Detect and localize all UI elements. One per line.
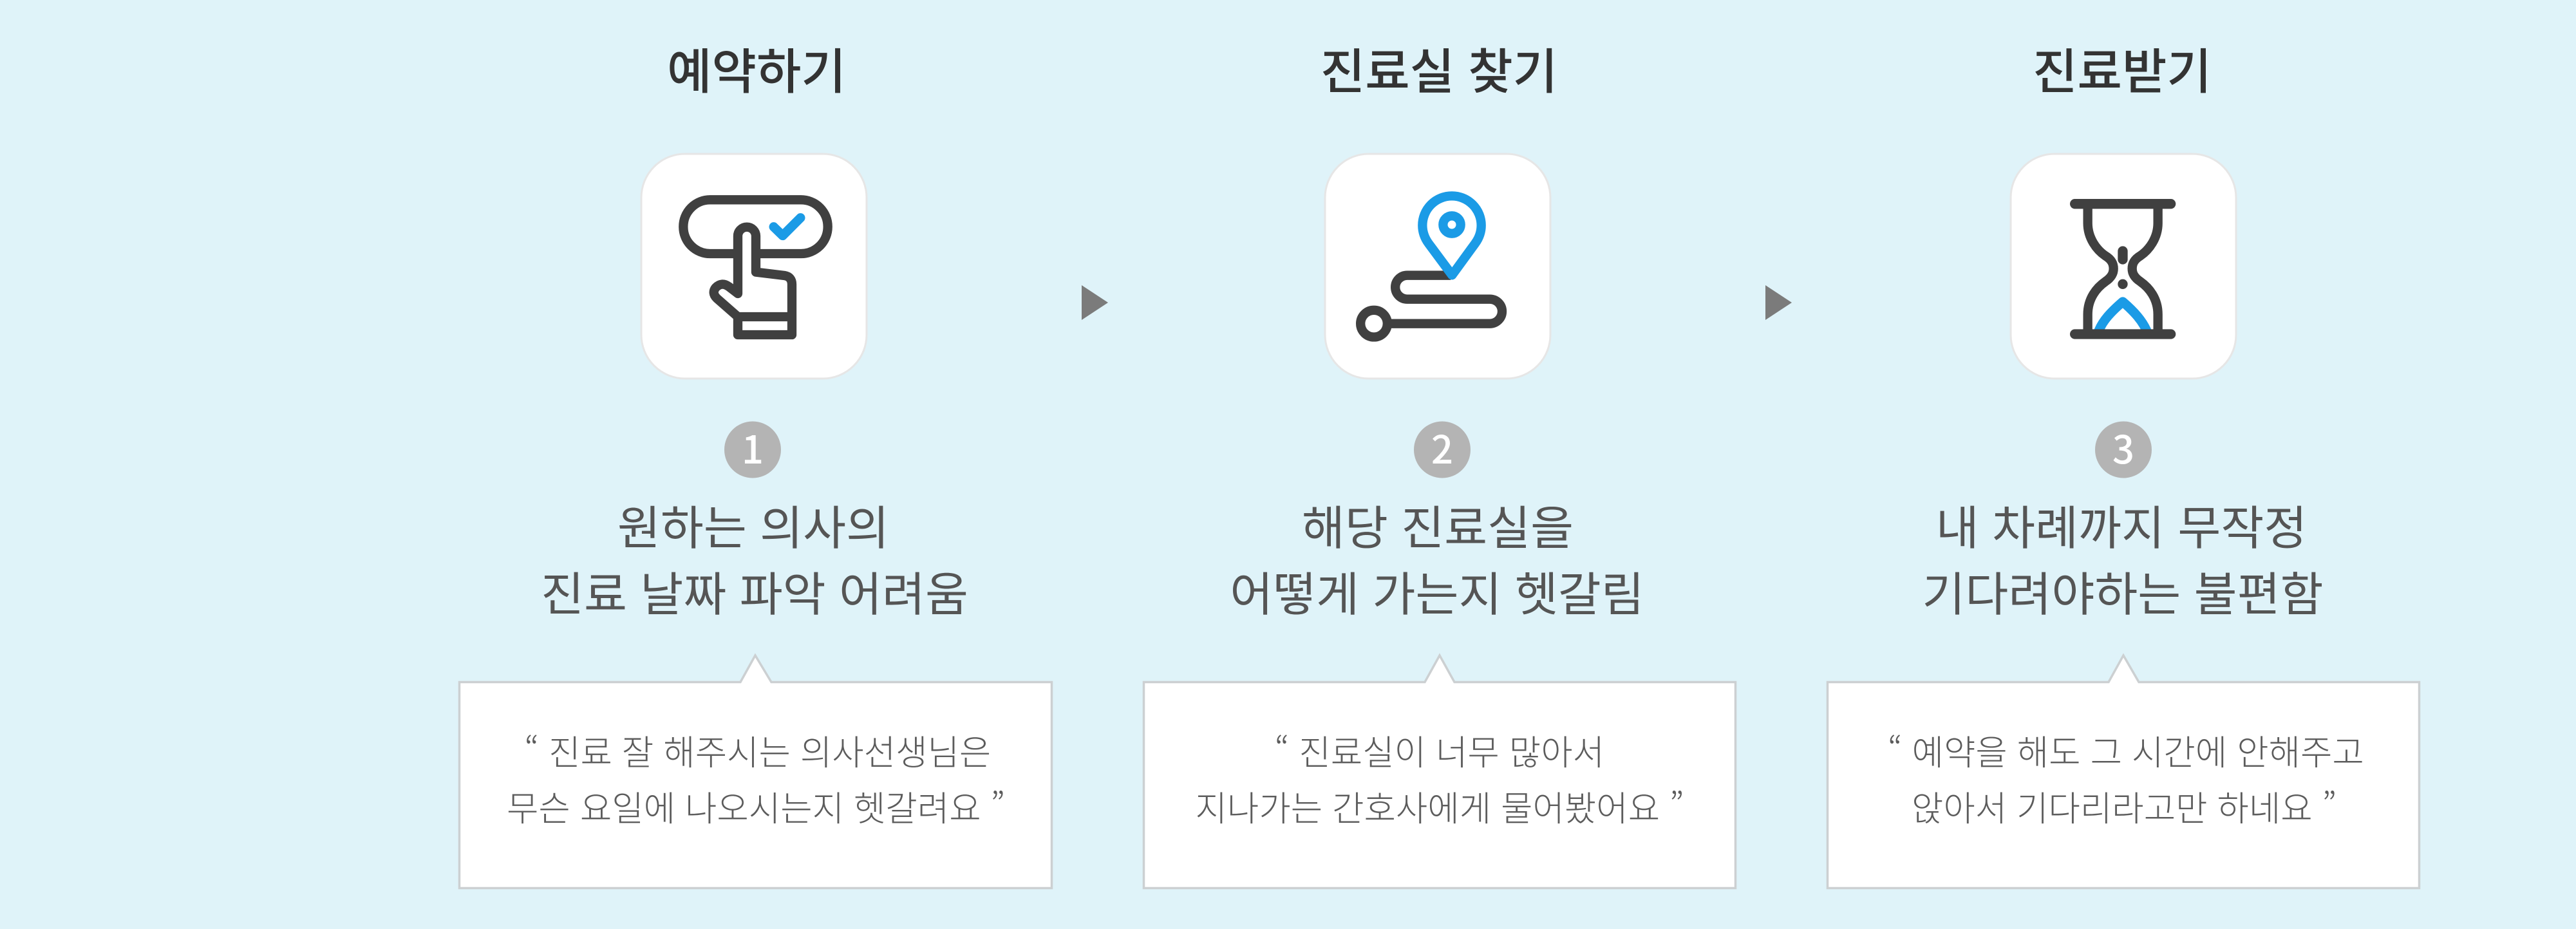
pain point text: step 2: 어떻게 가는지 헷갈림 (1230, 557, 1644, 624)
step 3 column (1827, 32, 2420, 888)
icon card: step 3 (2011, 154, 2236, 379)
heading: step 2: 진료실 찾기 (1321, 32, 1557, 103)
speech bubble: step 2 quote (1143, 655, 1736, 888)
speech bubble: step 2 quote: “ 진료실이 너무 많아서 (1275, 726, 1604, 775)
step number 2: 2 (1431, 419, 1453, 475)
icon card: step 1 (641, 154, 867, 379)
icon: map pin with winding route (1360, 196, 1502, 337)
pain point text: step 3 (1922, 491, 2324, 624)
icon: hourglass (2075, 204, 2171, 334)
step 1 column (460, 32, 1052, 888)
step number 1 (724, 419, 781, 478)
speech bubble: step 3 quote (1827, 655, 2420, 888)
pain point text: step 2 (1230, 491, 1644, 624)
icon card: step 2 (1325, 154, 1550, 379)
step 2 column (1143, 32, 1736, 888)
speech bubble: step 1 quote (460, 655, 1052, 888)
heading: step 3: 진료받기 (2033, 32, 2212, 103)
step number 2 (1414, 419, 1471, 478)
pain point text: step 3: 내 차례까지 무작정 (1936, 491, 2307, 558)
pain point text: step 1: 원하는 의사의 (617, 491, 889, 558)
arrow: step 2 to step 3 (1765, 285, 1792, 320)
step number 3: 3 (2112, 419, 2134, 475)
arrow: step 1 to step 2 (1082, 285, 1108, 320)
icon: finger tapping a checked button (683, 200, 828, 335)
speech bubble: step 1 quote: 무슨 요일에 나오시는지 헷갈려요 ” (507, 782, 1005, 831)
heading: step 1: 예약하기 (667, 32, 846, 103)
speech bubble: step 1 quote: “ 진료 잘 해주시는 의사선생님은 (525, 726, 991, 775)
speech bubble: step 2 quote: 지나가는 간호사에게 물어봤어요 ” (1196, 782, 1684, 831)
pain point text: step 1: 진료 날짜 파악 어려움 (541, 557, 968, 624)
speech bubble: step 3 quote: 앉아서 기다리라고만 하네요 ” (1912, 782, 2336, 831)
step number 1: 1 (742, 419, 764, 475)
pain point text: step 3: 기다려야하는 불편함 (1922, 557, 2324, 624)
pain point text: step 2: 해당 진료실을 (1302, 491, 1574, 558)
pain point text: step 1 (541, 491, 968, 624)
step number 3 (2095, 419, 2152, 478)
speech bubble: step 3 quote: “ 예약을 해도 그 시간에 안해주고 (1888, 726, 2364, 775)
